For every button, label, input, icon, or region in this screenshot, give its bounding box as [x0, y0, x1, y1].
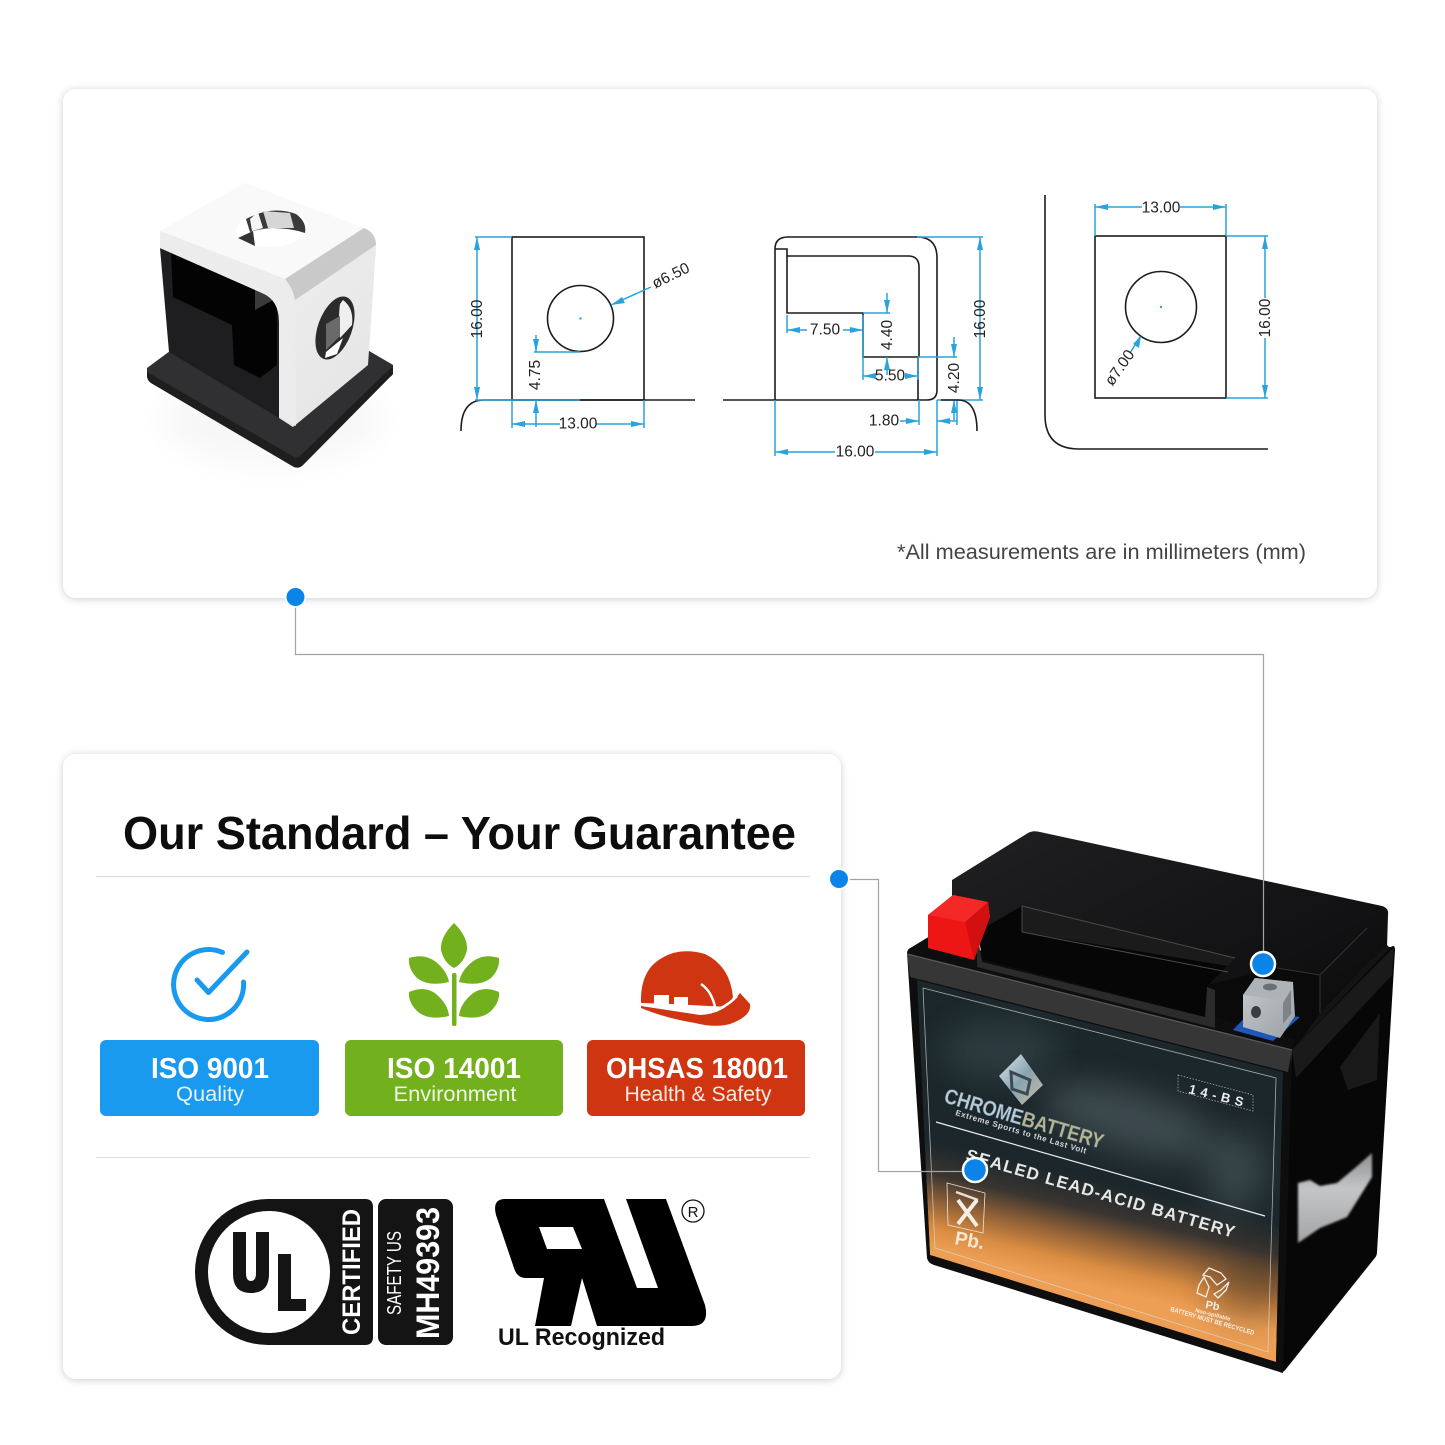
technical drawing: side section view: 1.80: [869, 412, 899, 430]
technical drawing: side section view: 4.20: [946, 363, 963, 393]
logo: UL recognized: [495, 1199, 706, 1351]
brand logo: [942, 1054, 1106, 1156]
model tag: 14-BS: [1187, 1081, 1246, 1110]
battery type text: SEALED LEAD-ACID BATTERY: [964, 1146, 1238, 1242]
model tag: [1178, 1075, 1253, 1111]
badge: ISO 14001: [345, 1040, 563, 1116]
brand logo: Extreme Sports to the Last Volt: [954, 1108, 1088, 1156]
marker: guarantee panel: [829, 869, 849, 889]
badge: ISO 9001: [100, 1040, 319, 1116]
disposal symbol: [947, 1183, 986, 1254]
technical drawing: side section view: 16.00: [972, 299, 989, 338]
technical drawing: top view: 16.00: [469, 299, 486, 338]
logo: UL certified: SAFETY US: [384, 1231, 406, 1315]
logo: UL certified: MH49393: [410, 1207, 446, 1339]
front rim: [907, 954, 1292, 1072]
technical drawing: side section view: [723, 237, 989, 460]
marker: terminal: [1251, 952, 1275, 976]
logo: UL recognized: UL Recognized: [498, 1324, 665, 1351]
badge: OHSAS 18001: [587, 1040, 805, 1116]
technical drawing: top view: 13.00: [559, 416, 598, 432]
battery lid: [952, 831, 1394, 1052]
front label: [917, 980, 1290, 1362]
badge: OHSAS 18001: OHSAS 18001: [606, 1053, 788, 1085]
icon: quality check: [174, 950, 247, 1020]
battery photo: [907, 831, 1395, 1373]
recycling symbol: Pb: [1204, 1299, 1221, 1313]
technical drawing: front view: ø7.00: [1102, 347, 1139, 389]
negative terminal block: [1243, 978, 1295, 1038]
panel: standards and guarantee: [63, 754, 841, 1379]
side highlight: [1298, 1153, 1372, 1243]
connector: dimensions to terminal: [296, 597, 1264, 964]
technical drawing: side section view: 7.50: [810, 322, 840, 338]
technical drawing: side section view: 5.50: [875, 368, 905, 384]
technical drawing: front view: 16.00: [1257, 298, 1274, 337]
front body: [907, 936, 1296, 1373]
logo: UL certified: [195, 1199, 453, 1345]
technical drawing: top view: ø6.50: [649, 260, 693, 292]
technical drawing: front view: [1045, 195, 1274, 449]
recycling symbol: BATTERY MUST BE RECYCLED: [1169, 1306, 1255, 1337]
marker: label: [963, 1158, 987, 1182]
panel: terminal dimensions: [63, 89, 1377, 598]
technical drawing: side section view: 4.40: [879, 320, 896, 350]
logo: UL certified: R: [320, 1212, 326, 1221]
battery tray recess: [977, 906, 1235, 1017]
icon: safety helmet: [641, 951, 750, 1026]
heading: Our Standard – Your Guarantee: [123, 807, 796, 859]
technical drawing: top view: 4.75: [527, 360, 544, 390]
logo: UL certified: CERTIFIED: [338, 1209, 366, 1335]
negative terminal base: [1233, 1012, 1300, 1041]
badge: ISO 14001: ISO 14001: [387, 1053, 521, 1085]
badge: OHSAS 18001: Health & Safety: [624, 1083, 772, 1106]
recycling symbol: [1169, 1268, 1255, 1337]
marker: dimensions panel: [286, 587, 306, 607]
connector: guarantee to label: [839, 880, 975, 1172]
badge: ISO 9001: Quality: [176, 1083, 245, 1106]
icon: 3D terminal cube: [147, 183, 393, 468]
logo: UL recognized: R: [688, 1204, 699, 1221]
technical drawing: top view: [461, 237, 695, 432]
positive terminal cap: [928, 895, 990, 960]
measurement note: *All measurements are in millimeters (mm): [897, 541, 1306, 564]
badge: ISO 14001: Environment: [394, 1083, 517, 1106]
brand logo: CHROMEBATTERY: [942, 1085, 1106, 1154]
icon: environment leaves: [409, 923, 499, 1026]
right side: [1279, 946, 1395, 1373]
technical drawing: front view: 13.00: [1142, 200, 1181, 216]
disposal symbol: Pb.: [953, 1228, 986, 1254]
technical drawing: side section view: 16.00: [836, 444, 875, 460]
recycling symbol: Non-spillable: [1195, 1308, 1231, 1323]
badge: ISO 9001: ISO 9001: [151, 1053, 269, 1085]
tray front wall: [977, 932, 1215, 1028]
